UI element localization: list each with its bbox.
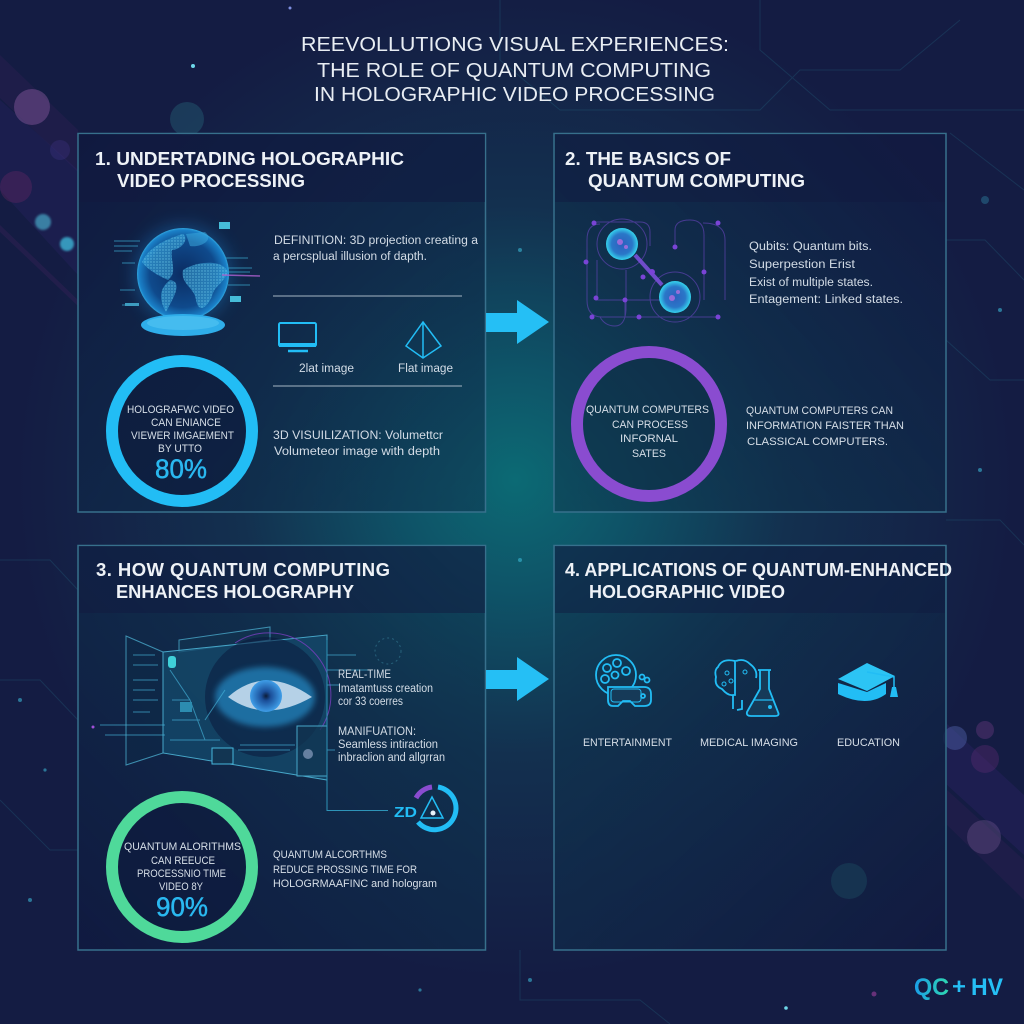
logo: QC + HV: +	[952, 974, 966, 999]
panel 3 heading	[96, 559, 390, 602]
stat ring: 80%: BY UTTO	[158, 443, 202, 455]
icon: 2D to 3D ring	[394, 787, 456, 830]
stat ring: quantum computers	[577, 352, 721, 496]
panel: basics of quantum computing	[554, 134, 946, 512]
title: REEVOLLUTIONG VISUAL EXPERIENCES:	[301, 33, 729, 56]
comparison label: 2lat image: 2lat image	[299, 363, 354, 375]
icon: 2D to 3D ring: ZD	[394, 804, 417, 821]
real-time text: Imatamtuss creation	[338, 683, 433, 695]
icon: holographic globe	[114, 222, 260, 336]
stat ring: 90%: CAN REEUCE	[151, 855, 215, 867]
panel 1 heading: VIDEO PROCESSING	[117, 170, 305, 191]
stat ring: 80%: VIEWER IMGAEMENT	[131, 430, 234, 442]
stat ring: 80%	[112, 361, 252, 501]
manipulation text	[338, 726, 445, 764]
panel 4 heading: HOLOGRAPHIC VIDEO	[589, 581, 785, 602]
title	[301, 33, 729, 106]
label: entertainment: ENTERTAINMENT	[583, 737, 672, 749]
qubit definitions text: Qubits: Quantum bits.	[749, 241, 872, 253]
manipulation text: Seamless intiraction	[338, 739, 438, 751]
stat ring: 90%: 90%	[156, 892, 208, 922]
icon: qubit network	[584, 219, 725, 326]
manipulation text: MANIFUATION:	[338, 726, 416, 738]
manipulation text: inbraclion and allgrran	[338, 752, 445, 764]
qubit definitions text	[749, 241, 903, 306]
speed comparison text: INFORMATION FAISTER THAN	[746, 420, 904, 432]
visualization text	[273, 430, 443, 458]
label: education: EDUCATION	[837, 737, 900, 749]
real-time text	[338, 669, 433, 708]
stat ring: 80%: 80%	[155, 454, 207, 484]
stat ring: quantum computers: SATES	[632, 448, 666, 460]
definition text: a percsplual illusion of dapth.	[273, 251, 427, 263]
logo: QC + HV: HV	[971, 974, 1003, 1001]
stat ring: 80%: CAN ENIANCE	[151, 417, 221, 429]
comparison label: flat image: Flat image	[398, 363, 453, 375]
panel: how quantum computing enhances holography	[78, 546, 486, 950]
stat ring: 90%: QUANTUM ALORITHMS	[124, 841, 241, 853]
speed comparison text: CLASSICAL COMPUTERS.	[747, 436, 888, 448]
definition text	[273, 235, 479, 263]
speed comparison text: QUANTUM COMPUTERS CAN	[746, 405, 893, 417]
stat ring: 90%	[112, 797, 252, 937]
logo: QC + HV: QC	[914, 974, 949, 1001]
panel 3 heading: 3. HOW QUANTUM COMPUTING	[96, 559, 390, 580]
arrow: panel 3 to panel 4	[486, 657, 549, 701]
panel 1 heading: 1. UNDERTADING HOLOGRAPHIC	[95, 148, 404, 169]
algorithms text: QUANTUM ALCORTHMS	[273, 849, 387, 861]
qubit definitions text: Superpestion Erist	[749, 259, 856, 271]
title: IN HOLOGRAPHIC VIDEO PROCESSING	[314, 83, 715, 106]
panel 1 heading	[95, 148, 404, 191]
panel 2 heading: QUANTUM COMPUTING	[588, 170, 805, 191]
panel 2 heading: 2. THE BASICS OF	[565, 148, 731, 169]
algorithms text: HOLOGRMAAFINC and hologram	[273, 878, 437, 890]
algorithms text	[273, 849, 437, 890]
arrow: panel 1 to panel 2	[486, 300, 549, 344]
definition text: DEFINITION: 3D projection creating a	[274, 235, 479, 247]
icon: graduation cap	[838, 663, 898, 701]
icon: holographic eye interface	[92, 627, 401, 810]
icon: pyramid	[406, 322, 441, 358]
qubit definitions text: Exist of multiple states.	[749, 277, 873, 289]
visualization text: Volumeteor image with depth	[274, 446, 440, 458]
logo: QC + HV	[914, 974, 1003, 1001]
panel 2 heading	[565, 148, 805, 191]
stat ring: 80%: HOLOGRAFWC VIDEO	[127, 404, 234, 416]
visualization text: 3D VISUILIZATION: Volumettcr	[273, 430, 443, 442]
icon: brain and flask	[715, 660, 779, 716]
title: THE ROLE OF QUANTUM COMPUTING	[317, 59, 711, 82]
stat ring: 90%: PROCESSNIO TIME	[137, 868, 226, 880]
panel 4 heading: 4. APPLICATIONS OF QUANTUM-ENHANCED	[565, 559, 952, 580]
panel: understanding holographic video processing	[78, 134, 486, 512]
real-time text: cor 33 coerres	[338, 696, 403, 708]
qubit definitions text: Entagement: Linked states.	[749, 294, 903, 306]
real-time text: REAL-TIME	[338, 669, 391, 681]
speed comparison text	[746, 405, 904, 448]
label: medical imaging: MEDICAL IMAGING	[700, 737, 798, 749]
stat ring: quantum computers: INFORNAL	[620, 433, 678, 445]
stat ring: 90%: VIDEO 8Y	[159, 881, 204, 893]
panel: applications	[554, 546, 952, 950]
panel 3 heading: ENHANCES HOLOGRAPHY	[116, 581, 355, 602]
icon: film reel and VR headset	[596, 655, 651, 706]
stat ring: quantum computers: QUANTUM COMPUTERS	[586, 404, 709, 416]
algorithms text: REDUCE PROSSING TIME FOR	[273, 864, 417, 876]
stat ring: quantum computers: CAN PROCESS	[612, 419, 688, 431]
icon: monitor	[279, 323, 316, 351]
panel 4 heading	[565, 559, 952, 602]
